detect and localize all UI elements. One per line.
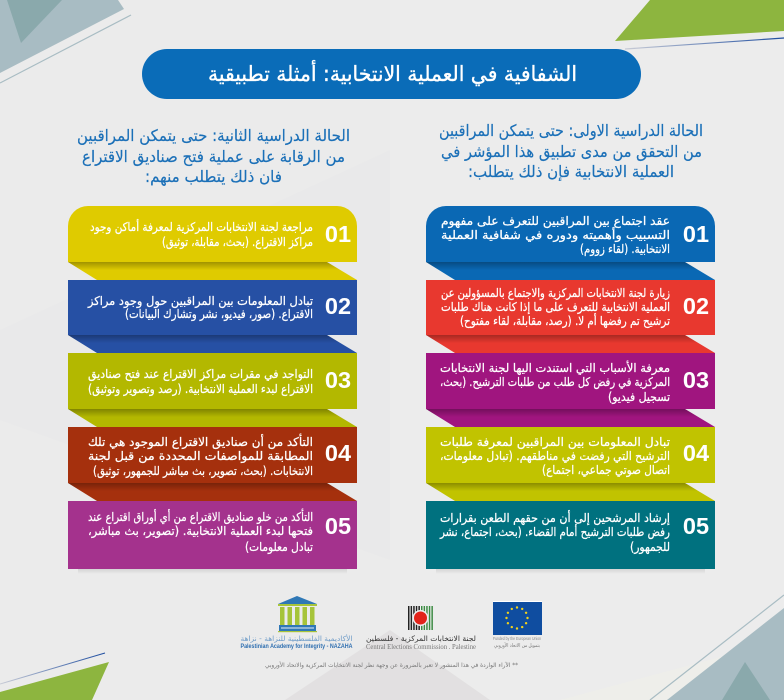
case one: step 01: الانتخابية. (لقاء زووم)	[580, 242, 670, 257]
logo: Academy for Integrity	[240, 596, 353, 650]
logo: Academy for Integrity: الأكاديمية الفلسطينية للنزاهة - نزاهة	[240, 634, 353, 643]
case one: step 05: 05	[683, 513, 709, 539]
case one: step 01: عقد اجتماع بين المراقبين للتعرف على مفهوم	[441, 214, 670, 229]
decoration: bottom left shard	[0, 653, 109, 700]
case two: step 05	[68, 501, 357, 574]
heading: first case study: الحالة الدراسية الاولى: حتى يتمكن المراقبين	[439, 121, 703, 141]
case two: step 02: الاقتراع. (صور، فيديو، نشر وتشارك البيانات)	[125, 307, 313, 322]
title banner: الشفافية في العملية الانتخابية: أمثلة تطبيقية	[208, 60, 577, 86]
case one: step 05	[426, 501, 715, 574]
case two: step 04	[68, 427, 357, 501]
case two: step 02: تبادل المعلومات بين المراقبين حول وجود مراكز	[87, 294, 313, 309]
case one: step 01	[426, 206, 715, 280]
case one: step 04: تبادل المعلومات بين المراقبين لمعرفة طلبات	[440, 435, 670, 450]
case one: step 04: 04	[683, 440, 709, 466]
heading: first case study	[439, 121, 703, 181]
heading: second case study: الحالة الدراسية الثانية: حتى يتمكن المراقبين	[77, 126, 350, 146]
title banner	[142, 49, 641, 99]
case one: step 01: 01	[683, 221, 709, 247]
case one: step 04: الترشيح التي رفضت في مناطقهم. (تبادل معلومات،	[440, 449, 670, 464]
case one: step 04	[426, 427, 715, 501]
case two: step 04: التأكد من أن صناديق الاقتراع الموجود هي تلك	[88, 433, 313, 450]
case one: step 02: 02	[683, 293, 709, 319]
decoration: top right shard	[615, 0, 784, 49]
heading: first case study: من التحقق من مدى تطبيق هذا المؤشر في	[441, 142, 702, 162]
case two: step 05: 05	[325, 513, 351, 539]
case one: step 05: رفض طلبات الترشيح أمام القضاء. (بحث، اجتماع، نشر	[439, 524, 670, 540]
decoration: top left shard	[0, 0, 131, 83]
case two: step 03	[68, 353, 357, 427]
heading: second case study: من الرقابة على عملية فتح صناديق الاقتراع	[82, 147, 345, 167]
disclaimer: ** الآراء الواردة في هذا المنشور لا تعبر بالضرورة عن وجهة نظر لجنة الانتخابات المركزية والاتحاد الأوروبي	[265, 661, 518, 669]
case one: step 02	[426, 280, 715, 353]
logo: Central Elections Commission: Central Elections Commission . Palestine	[366, 643, 476, 651]
case one: step 05: إرشاد المرشحين إلى أن من حقهم الطعن بقرارات	[440, 510, 670, 526]
logo: European Union: Funded by the European Union	[493, 636, 541, 641]
case two: step 05: فتحها لبدء العملية الانتخابية. (تصوير، بث مباشر،	[88, 524, 313, 539]
case one: step 03: 03	[683, 367, 709, 393]
case two: step 01	[68, 206, 357, 280]
case two: step 03: 03	[325, 367, 351, 393]
case one: step 02: ترشيح تم رفضها أم لا. (رصد، مقابلة، لقاء مفتوح)	[460, 313, 670, 329]
case two: step 01: مراكز الاقتراع. (بحث، مقابلة، توثيق)	[162, 235, 313, 250]
case one: step 05: للجمهور)	[630, 540, 670, 555]
case two: step 05: التأكد من خلو صناديق الاقتراع من أي أوراق اقتراع عند	[88, 508, 313, 525]
heading: second case study	[77, 126, 350, 187]
logo: Central Elections Commission	[366, 606, 476, 651]
case one: step 03	[426, 353, 715, 427]
case one: step 03: معرفة الأسباب التي استندت اليها لجنة الانتخابات	[440, 360, 670, 376]
case two: step 01: مراجعة لجنة الانتخابات المركزية لمعرفة أماكن وجود	[90, 219, 313, 235]
case two: step 03: التواجد في مقرات مراكز الاقتراع عند فتح صناديق	[88, 367, 313, 382]
logo: Central Elections Commission: لجنة الانتخابات المركزية - فلسطين	[366, 634, 476, 643]
case two: step 04: 04	[325, 440, 351, 466]
case one: step 02: زيارة لجنة الانتخابات المركزية والاجتماع بالمسؤولين عن	[441, 286, 670, 301]
logo: European Union	[493, 601, 542, 649]
case one: step 02: العملية الانتخابية للتعرف على ما إذا كانت هناك طلبات	[441, 300, 670, 315]
decoration: bottom right shard	[650, 595, 784, 700]
case two: step 04: الانتخابات. (بحث، تصوير، بث مباشر للجمهور، توثيق)	[93, 464, 313, 479]
case two: step 03: الاقتراع لبدء العملية الانتخابية. (رصد وتصوير وتوثيق)	[88, 382, 313, 397]
case one: step 04: اتصال صوتي جماعي، اجتماع)	[542, 463, 670, 478]
case two: step 02	[68, 280, 357, 353]
logo: Academy for Integrity: Palestinian Academy for Integrity - NAZAHA	[240, 644, 353, 650]
case one: step 01: التسبيب وأهميته ودوره في شفافية العملية	[441, 227, 670, 243]
case one: step 03: المركزية في رفض كل طلب من طلبات الترشيح. (بحث،	[440, 375, 670, 390]
heading: second case study: فان ذلك يتطلب منهم:	[145, 167, 282, 187]
heading: first case study: العملية الانتخابية فإن ذلك يتطلب:	[468, 162, 674, 181]
case two: step 02: 02	[325, 293, 351, 319]
logo: European Union: بتمويل من الاتحاد الأوروبي	[494, 642, 540, 649]
case two: step 04: المطابقة للمواصفات المحددة من قبل لجنة	[88, 449, 313, 464]
case two: step 01: 01	[325, 221, 351, 247]
case two: step 05: تبادل معلومات)	[245, 540, 313, 555]
case one: step 03: تسجيل فيديو)	[608, 390, 670, 405]
